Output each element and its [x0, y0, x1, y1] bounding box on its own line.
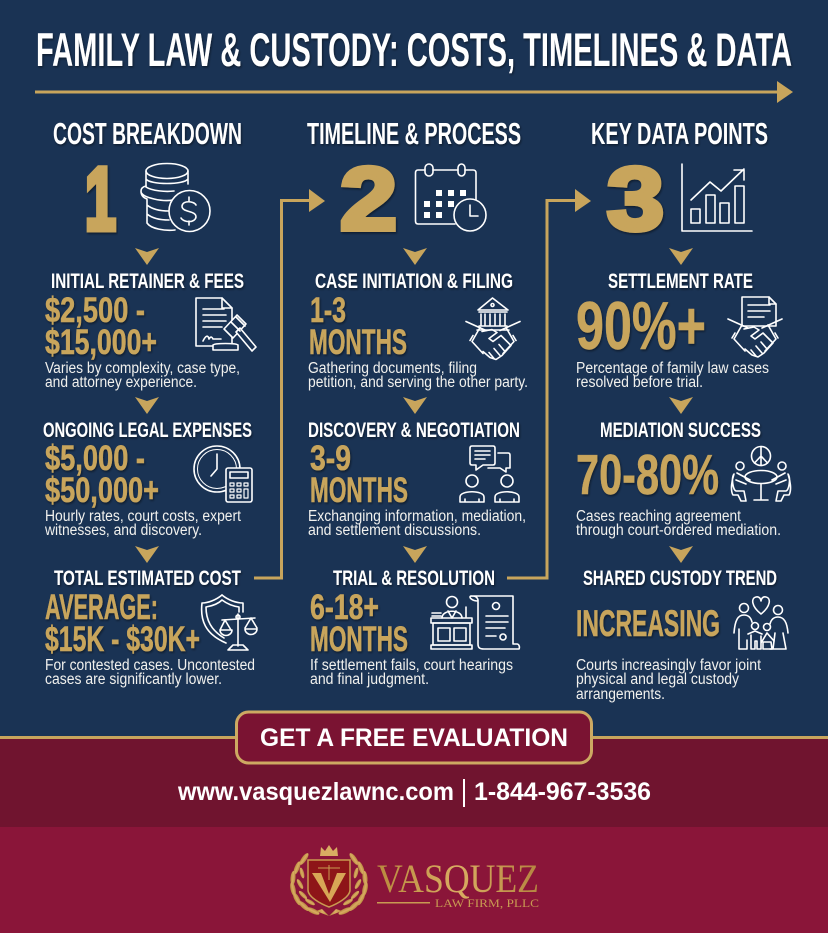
number 1: 1: [85, 148, 116, 248]
text: discovery description: and settlement discussions.: [308, 522, 481, 539]
background: navy panel: [0, 0, 828, 738]
arrow: down: [669, 397, 693, 414]
value: average cost: [45, 588, 200, 659]
arrow: down: [669, 546, 693, 563]
icon: clock and calculator: [194, 446, 252, 502]
value: 90 percent: 90%+: [576, 288, 706, 364]
heading: discovery: DISCOVERY & NEGOTIATION: [308, 419, 520, 442]
text: mediation description: through court-ordered mediation.: [576, 522, 781, 539]
panel: contact band: [0, 738, 828, 827]
value: 1-3 months: 1-3: [310, 291, 346, 330]
arrow: down: [135, 248, 159, 265]
text: mediation description: [576, 508, 781, 539]
text: case initiation description: Gathering documents, filing: [308, 360, 477, 377]
number 2: 2: [340, 148, 397, 248]
logo wordmark: VASQUEZ: [377, 856, 539, 901]
value: 1-3 months: [309, 291, 407, 362]
button: get a free evaluation: GET A FREE EVALUATION: [260, 724, 568, 752]
text: custody description: arrangements.: [576, 686, 665, 703]
text: total cost description: [45, 657, 255, 688]
text: total cost description: cases are significantly lower.: [45, 671, 222, 688]
text: ongoing description: Hourly rates, court costs, expert: [45, 508, 242, 525]
value: 1-3 months: MONTHS: [309, 323, 407, 362]
text: ongoing description: [44, 508, 242, 539]
value: retainer range: [45, 291, 157, 362]
text: custody description: [576, 657, 762, 703]
arrow: down: [135, 397, 159, 414]
arrow: down: [669, 248, 693, 265]
icon: shield with V: [308, 860, 350, 907]
value: retainer range: $15,000+: [45, 323, 157, 362]
text: ongoing description: witnesses, and discovery.: [44, 522, 202, 539]
icon: judge bench and scroll: [431, 596, 519, 649]
text: case initiation description: petition, and serving the other party.: [308, 374, 528, 391]
heading: mediation success: MEDIATION SUCCESS: [600, 419, 761, 442]
text: trial description: and final judgment.: [310, 671, 429, 688]
text: settlement description: [576, 360, 769, 391]
arrow: down: [135, 546, 159, 563]
decorative gold band edge: [0, 736, 828, 739]
value: 3-9 months: 3-9: [310, 439, 351, 478]
logo: Vasquez Law Firm: [289, 845, 539, 916]
heading: cost breakdown: COST BREAKDOWN: [53, 116, 242, 151]
value: ongoing range: $5,000 -: [45, 439, 145, 478]
text: settlement description: Percentage of family law cases: [576, 360, 769, 377]
panel: timeline and process: [307, 116, 528, 688]
arrow: connector from cost to timeline: [254, 200, 312, 578]
arrow: down: [403, 397, 427, 414]
icon: calendar and clock: [416, 164, 486, 231]
heading: initial retainer: INITIAL RETAINER & FEES: [51, 270, 244, 293]
arrow: connector head: [575, 189, 591, 212]
icon: rising bar chart: [682, 164, 752, 231]
text: custody description: Courts increasingly favor joint: [576, 657, 762, 674]
icon: shield and scales: [202, 595, 257, 650]
number 3: 3: [607, 148, 664, 248]
text: discovery description: [308, 508, 526, 539]
icon: family with heart: [734, 597, 788, 649]
heading: timeline: TIMELINE & PROCESS: [307, 116, 521, 151]
value: 6-18+ months: MONTHS: [310, 620, 408, 659]
icon: document and gavel: [196, 298, 256, 351]
arrow: down: [403, 546, 427, 563]
heading: settlement rate: SETTLEMENT RATE: [608, 270, 753, 293]
text: custody description: physical and legal custody: [576, 671, 739, 688]
value: 3-9 months: [310, 439, 408, 510]
value: 3-9 months: MONTHS: [310, 471, 408, 510]
text: trial description: [310, 657, 513, 688]
text: mediation description: Cases reaching agreement: [576, 508, 742, 525]
arrow: connector from timeline to data: [507, 200, 578, 578]
heading: ongoing expenses: ONGOING LEGAL EXPENSES: [43, 419, 252, 442]
panel: key data points: [576, 116, 791, 703]
heading: total estimated cost: TOTAL ESTIMATED COST: [54, 567, 241, 590]
text: settlement description: resolved before trial.: [576, 374, 703, 391]
heading: case initiation: CASE INITIATION & FILING: [315, 270, 513, 293]
text: trial description: If settlement fails, court hearings: [310, 657, 513, 674]
value: retainer range: $2,500 -: [45, 291, 145, 330]
icon: courthouse and handshake: [466, 298, 520, 360]
icon: mediation table with peace sign: [731, 446, 791, 501]
contact line: 1-844-967-3536: [474, 778, 651, 806]
icon: document and handshake: [728, 297, 782, 357]
value: ongoing range: $50,000+: [45, 471, 159, 510]
text: total cost description: For contested cases. Uncontested: [45, 657, 255, 674]
text: retainer description: Varies by complexity, case type,: [45, 360, 240, 377]
arrow: down: [403, 248, 427, 265]
button: get a free evaluation: [236, 712, 592, 763]
heading: trial and resolution: TRIAL & RESOLUTION: [333, 567, 495, 590]
text: retainer description: and attorney experience.: [45, 374, 197, 391]
logo subtitle: LAW FIRM, PLLC: [435, 896, 539, 910]
text: discovery description: Exchanging information, mediation,: [308, 508, 526, 525]
arrow: connector head: [309, 189, 325, 212]
value: 6-18+ months: 6-18+: [310, 588, 379, 627]
text: case initiation description: [308, 360, 528, 391]
arrow: title rule: [35, 81, 793, 103]
decorative rule: [377, 902, 430, 904]
value: average cost: AVERAGE:: [45, 588, 158, 627]
icon: two people with speech bubbles: [460, 446, 519, 502]
icon: laurel wreath and crown: [289, 845, 369, 916]
panel: footer: [0, 827, 828, 933]
value: average cost: $15K - $30K+: [45, 620, 200, 659]
text: retainer description: [45, 360, 240, 391]
contact line: www.vasquezlawnc.com: [177, 778, 454, 806]
value: increasing: INCREASING: [576, 603, 720, 644]
value: ongoing range: [45, 439, 159, 510]
icon: coin stack with dollar: [141, 164, 210, 232]
value: 6-18+ months: [310, 588, 408, 659]
panel: cost breakdown: [43, 116, 257, 688]
value: 70-80 percent: 70-80%: [576, 443, 719, 507]
contact line: [177, 778, 651, 807]
